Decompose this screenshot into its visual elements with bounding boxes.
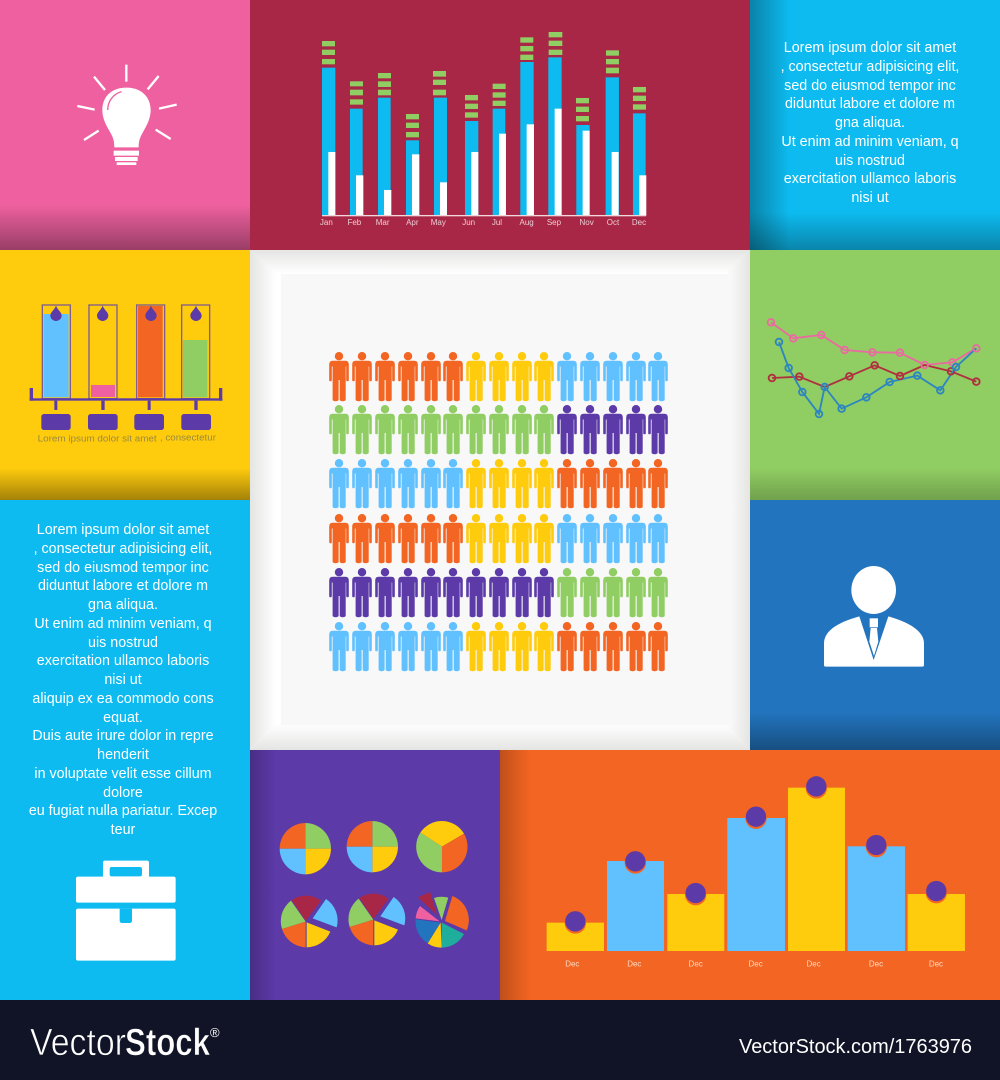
- panel: business person: [750, 500, 1000, 750]
- pictogram row 2: [329, 405, 668, 454]
- text block: top right: sed do eiusmod tempor inc: [784, 78, 956, 94]
- panel: lightbulb: [0, 0, 250, 250]
- panel: test tubes: [0, 250, 250, 500]
- bar chart: Dec columns: Dec: [749, 960, 763, 969]
- bar chart: Dec columns: [547, 776, 965, 969]
- text block: left: uis nostrud: [88, 635, 158, 651]
- bar chart: Dec columns: Dec: [807, 960, 821, 969]
- bar chart: Dec columns: Dec: [627, 960, 641, 969]
- text block: left: gna aliqua.: [88, 597, 158, 613]
- text block: left: aliquip ex ea commodo cons: [32, 691, 214, 707]
- line chart: three series: [768, 319, 980, 417]
- footer logo: [30, 1022, 220, 1064]
- text block: left: teur: [111, 822, 136, 838]
- text block: top right: [781, 40, 959, 206]
- pie charts group: [280, 821, 469, 948]
- bar chart: months: Nov: [580, 218, 594, 227]
- text block: left: equat.: [103, 710, 143, 726]
- bar chart: Dec columns: Dec: [689, 960, 703, 969]
- footer logo: Vector: [30, 1022, 126, 1064]
- pie 1: [280, 823, 331, 874]
- bar chart: months: Jan: [320, 218, 333, 227]
- text block: left: in voluptate velit esse cillum: [34, 766, 212, 782]
- text block: top right: , consectetur adipisicing elit,: [781, 59, 959, 75]
- bar chart: months: Jun: [462, 218, 475, 227]
- text block: top right: diduntut labore et dolore m: [785, 96, 955, 112]
- pictogram row 3: [329, 459, 668, 508]
- pictogram row 4: [329, 514, 668, 563]
- text block: left: exercitation ullamco laboris: [37, 653, 209, 669]
- text block: left: sed do eiusmod tempor inc: [37, 560, 209, 576]
- icon: lightbulb: [77, 65, 177, 165]
- pie 4: [281, 896, 338, 947]
- pictogram row 5: [329, 568, 668, 617]
- bar chart: months: [320, 32, 646, 227]
- bar chart: months: Mar: [376, 218, 390, 227]
- pictogram row 6: [329, 622, 668, 671]
- text block: left: [29, 522, 217, 838]
- text block: left: diduntut labore et dolore m: [38, 578, 208, 594]
- text block: top right: nisi ut: [851, 190, 889, 206]
- panel: dot bar chart: [500, 750, 1000, 1000]
- panel: left text and briefcase: [0, 500, 250, 1000]
- bar chart: months: Jul: [492, 218, 502, 227]
- bar chart: months: May: [431, 218, 446, 227]
- bar chart: months: Feb: [347, 218, 362, 227]
- pie 5: [348, 894, 405, 945]
- text block: left: Lorem ipsum dolor sit amet: [37, 522, 209, 538]
- bar chart: months: Apr: [406, 218, 419, 227]
- bar chart: months: Aug: [520, 218, 534, 227]
- icon: business person: [824, 566, 924, 667]
- pie 2: [347, 821, 398, 872]
- panel: monthly bar chart: [250, 0, 750, 250]
- footer bar: [0, 1000, 1000, 1080]
- text block: top right: exercitation ullamco laboris: [784, 171, 956, 187]
- panel: pie charts: [250, 750, 500, 1000]
- bar chart: months: Oct: [607, 218, 620, 227]
- pie 6: [416, 892, 469, 948]
- text block: left: dolore: [103, 785, 143, 801]
- bar chart: Dec columns: Dec: [869, 960, 883, 969]
- text block: top right: Ut enim ad minim veniam, q: [781, 134, 959, 150]
- text block: left: Duis aute irure dolor in repre: [32, 728, 214, 744]
- bar chart: Dec columns: Dec: [565, 960, 579, 969]
- text block: top right: Lorem ipsum dolor sit amet: [784, 40, 956, 56]
- text block: top right: gna aliqua.: [835, 115, 905, 131]
- icon: briefcase: [76, 861, 176, 961]
- text block: left: henderit: [97, 747, 149, 763]
- text block: left: , consectetur adipisicing elit,: [34, 541, 212, 557]
- footer logo: Stock: [125, 1022, 211, 1064]
- bar chart: months: Dec: [632, 218, 646, 227]
- chart: test tubes: [30, 305, 222, 444]
- text block: left: eu fugiat nulla pariatur. Excep: [29, 803, 217, 819]
- panel: top right text: [750, 0, 1000, 250]
- bar chart: months: Sep: [547, 218, 562, 227]
- bar chart: Dec columns: Dec: [929, 960, 943, 969]
- pie 3: [416, 821, 468, 872]
- pictogram row 1: [329, 352, 668, 401]
- panel: line chart: [750, 250, 1000, 500]
- chart: test tubes: Lorem ipsum dolor sit amet: [38, 434, 157, 444]
- chart: test tubes: , consectetur: [160, 433, 216, 443]
- text block: left: nisi ut: [104, 672, 142, 688]
- panel: people grid: [250, 250, 750, 750]
- footer url: VectorStock.com/1763976: [739, 1036, 972, 1058]
- footer logo: ®: [210, 1025, 220, 1040]
- text block: left: Ut enim ad minim veniam, q: [34, 616, 212, 632]
- text block: top right: uis nostrud: [835, 153, 905, 169]
